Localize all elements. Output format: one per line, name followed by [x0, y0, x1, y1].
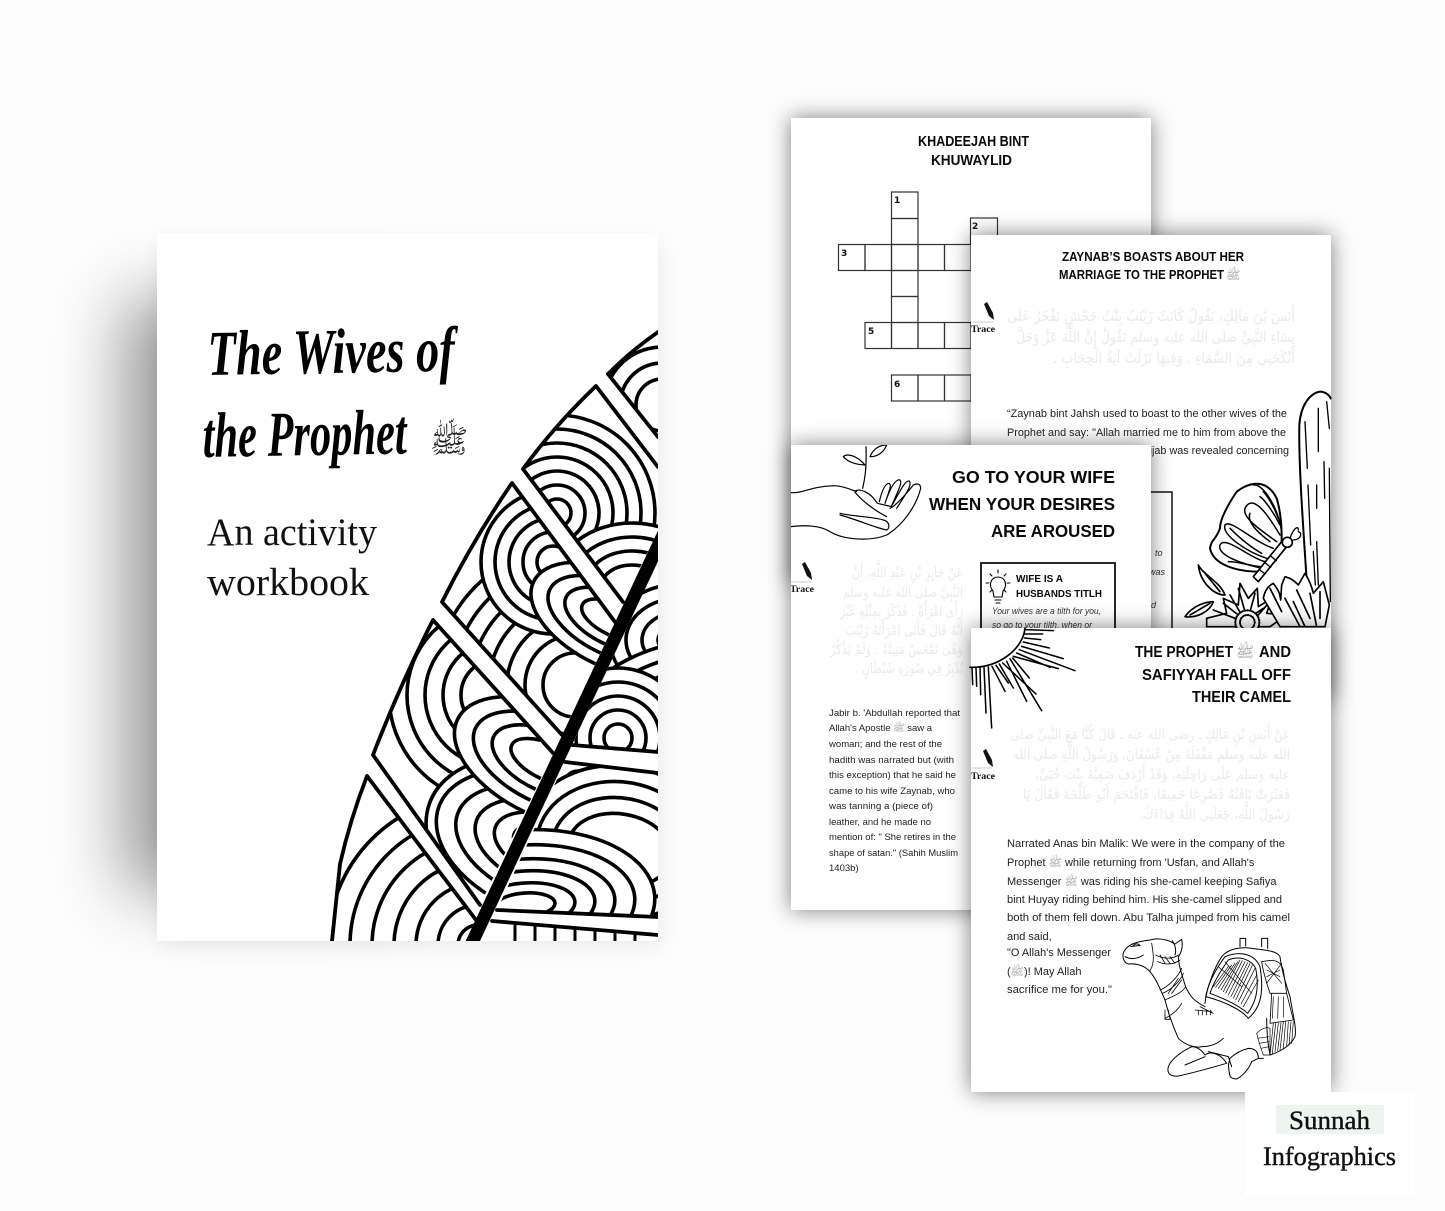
Jabir hadith text: mention of: " She retires in the [829, 832, 956, 843]
panel: workbook cover [157, 236, 658, 941]
crossword numbers: 6 [894, 380, 900, 390]
Jabir hadith text: this exception) that he said he [829, 770, 956, 781]
panel: go to your wife page [790, 445, 1151, 910]
Jabir hadith text: Jabir b. 'Abdullah reported that [829, 708, 960, 719]
cover subtitle: An activity [207, 511, 377, 554]
Anas hadith text [1007, 838, 1290, 996]
callout: wife is a husband's tilth [980, 562, 1116, 628]
icon: trace pen [791, 562, 814, 592]
panel: camel page [970, 628, 1331, 1092]
camel page title: THE PROPHET [1135, 644, 1233, 661]
crossword numbers: 5 [868, 327, 874, 337]
Arabic tracing text: أَنَّهُ قَالَ فَأَتَى امْرَأَتَهُ زَيْنَبَ [845, 618, 963, 639]
go to your wife title: GO TO YOUR WIFE [952, 467, 1115, 487]
camel page title: THEIR CAMEL [1192, 689, 1291, 706]
leaf segment outlines [332, 332, 658, 941]
Arabic tracing text [829, 560, 963, 680]
illustration: hand holding plant [791, 445, 921, 539]
Arabic tracing text: تُدْبِرُ فِي صُورَةِ شَيْطَانٍ . [855, 660, 963, 680]
panel: brand background [1245, 1092, 1415, 1196]
Anas hadith text: Narrated Anas bin Malik: We were in the company of the [1007, 838, 1285, 850]
crossword numbers: 2 [972, 222, 978, 232]
crossword title: KHADEEJAH BINT [918, 134, 1029, 150]
Jabir hadith text: Allah's Apostle ﷺ saw a [829, 721, 933, 734]
Jabir hadith text: leather, and he made no [829, 817, 931, 828]
icon: trace pen: Trace [971, 325, 995, 335]
Arabic tracing text: فَعَثَرَتْ نَاقَتُهُ فَصُرِعَا جَمِيعًا، فَاقْتَحَمَ أَبُو طَلْحَةَ فَقَالَ يَا [1023, 783, 1290, 804]
Jabir hadith text: 1403b) [829, 863, 859, 874]
Zaynab title: MARRIAGE TO THE PROPHET [1059, 268, 1224, 282]
cover subtitle [207, 511, 377, 604]
illustration: cactus, butterfly and flowers [1185, 392, 1331, 634]
Jabir hadith text: hadith was narrated but (with [829, 755, 954, 766]
Anas hadith text: "O Allah's Messenger [1007, 947, 1111, 959]
cover shadow [125, 245, 660, 945]
Zaynab hadith text: Heavens." And the Verse of Hijab was revealed concerning [1007, 445, 1289, 457]
icon: trace pen: Trace [971, 772, 995, 782]
panel: Zaynab page [971, 235, 1331, 700]
Anas hadith text: both of them fell down. Abu Talha jumped from his camel [1007, 912, 1290, 924]
illustration: sun [970, 628, 1075, 728]
honorific calligraphy: ﷺ [430, 418, 468, 460]
Zaynab title [1059, 250, 1244, 282]
cover title: The Wives of [207, 314, 459, 389]
Arabic tracing text: أَنْكَحَنِي مِنَ السَّمَاءِ . وَفِيهَا نَزَلَتْ آيَةُ الْحِجَابِ . [1053, 345, 1295, 369]
callout box edge: was [1149, 567, 1166, 577]
Arabic tracing text: الله عليه وسلم مَقْفَلَهُ مِنْ عُسْفَانَ، وَرَسُولُ اللَّهِ صلى الله [1013, 742, 1290, 763]
cover title [202, 314, 459, 471]
Zaynab hadith text: Prophet and say: "Allah married me to him from above the [1007, 427, 1286, 439]
leaf line art [330, 330, 658, 941]
crossword numbers: 3 [841, 249, 847, 259]
Arabic tracing text: رَأَى امْرَأَةً . فَذَكَرَ بِمِثْلِهِ غَيْرَ [839, 600, 963, 620]
crossword numbers [841, 196, 978, 390]
Zaynab title: ZAYNAB’S BOASTS ABOUT HER [1062, 250, 1244, 264]
callout: wife is a husband's tilth: so go to your tilth, when or [992, 620, 1093, 630]
Anas hadith text: bint Huyay riding behind him. His she-camel slipped and [1007, 894, 1282, 906]
Arabic tracing text: وَهْىَ تَمْعَسُ مَنِيئَةً . وَلَمْ يَذْكُرْ [829, 640, 963, 658]
camel page title: AND [1259, 644, 1291, 661]
Jabir hadith text [828, 708, 960, 874]
Anas hadith text: and said, [1007, 931, 1052, 943]
Arabic tracing text: عَنْ جَابِرِ بْنِ عَبْدِ اللَّهِ، أَنَّ [852, 560, 963, 583]
Anas hadith text: Messenger ﷺ was riding his she-camel keeping Safiya [1007, 873, 1277, 888]
camel page title [1135, 641, 1291, 706]
crossword grid [838, 192, 998, 401]
brand logo: Sunnah Infographics [1263, 1105, 1396, 1171]
callout box edge: d [1151, 600, 1157, 610]
panel: crossword page [791, 118, 1151, 583]
crossword title: KHUWAYLID [931, 153, 1012, 169]
cover title: the Prophet [202, 396, 409, 471]
crossword title [918, 134, 1029, 169]
Jabir hadith text: woman; and the rest of the [828, 739, 942, 750]
callout: wife is a husband's tilth: HUSBANDS TITLH [1016, 588, 1102, 600]
camel page title: ﷺ [1236, 641, 1254, 661]
Anas hadith text: (ﷺ)! May Allah [1007, 963, 1081, 978]
Anas hadith text: Prophet ﷺ while returning from 'Usfan, and Allah's [1007, 854, 1255, 869]
go to your wife title [929, 471, 1114, 537]
Zaynab hadith text: “Zaynab bint Jahsh used to boast to the other wives of the [1007, 408, 1287, 420]
callout box edge: to [1155, 548, 1163, 558]
Arabic tracing text [1010, 723, 1290, 823]
Arabic tracing text: عليه وسلم عَلَى رَاحِلَتِهِ، وَقَدْ أَرْدَفَ صَفِيَّةَ بِنْتَ حُيَىٍّ، [1035, 763, 1290, 783]
Arabic tracing text: رَسُولَ اللَّهِ، جَعَلَنِي اللَّهُ فِدَاءَكَ. [1140, 802, 1290, 823]
Zaynab title: ﷺ [1226, 266, 1240, 282]
icon: trace pen: Trace [790, 585, 814, 595]
leaf midrib [470, 531, 665, 947]
callout: wife is a husband's tilth: WIFE IS A [1016, 573, 1063, 585]
brand logo: Sunnah Infographics: Infographics [1263, 1142, 1396, 1171]
go to your wife title: ARE AROUSED [991, 521, 1115, 541]
Arabic tracing text [1007, 303, 1295, 369]
go to your wife title: WHEN YOUR DESIRES [929, 494, 1115, 514]
Anas hadith text: sacrifice me for you." [1007, 984, 1112, 996]
Jabir hadith text: shape of satan." (Sahih Muslim [829, 848, 958, 859]
brand logo: Sunnah Infographics: Sunnah [1289, 1106, 1370, 1135]
icon: trace pen [971, 749, 995, 782]
Arabic tracing text: عَنْ أَنَسِ بْنِ مَالِكٍ ـ رضى الله عنه ـ قَالَ كُنَّا مَعَ النَّبِيِّ صلى [1010, 723, 1290, 745]
icon: trace pen [971, 302, 995, 335]
Zaynab hadith text [1007, 408, 1289, 457]
cover subtitle: workbook [207, 561, 370, 604]
Arabic tracing text: النَّبِيَّ صلى الله عليه وسلم [843, 584, 963, 601]
camel page title: SAFIYYAH FALL OFF [1142, 667, 1291, 684]
Arabic tracing text: أَنَسَ بْنَ مَالِكٍ، يَقُولُ كَانَتْ زَيْنَبُ بِنْتُ جَحْشٍ تَفْخَرُ عَلَى [1007, 303, 1295, 329]
callout box edge [1100, 492, 1172, 692]
callout: wife is a husband's tilth: Your wives are a tilth for you, [992, 606, 1101, 616]
Arabic tracing text: نِسَاءِ النَّبِيِّ صلى الله عليه وسلم تَقُولُ إِنَّ اللَّهَ عَزَّ وَجَلَّ [1016, 324, 1295, 349]
illustration: camel [1123, 938, 1295, 1079]
crossword numbers: 1 [894, 196, 900, 206]
icon: light bulb [986, 570, 1010, 603]
Jabir hadith text: came to his wife Zaynab, who [829, 786, 955, 797]
Jabir hadith text: was tanning a (piece of) [828, 801, 933, 812]
